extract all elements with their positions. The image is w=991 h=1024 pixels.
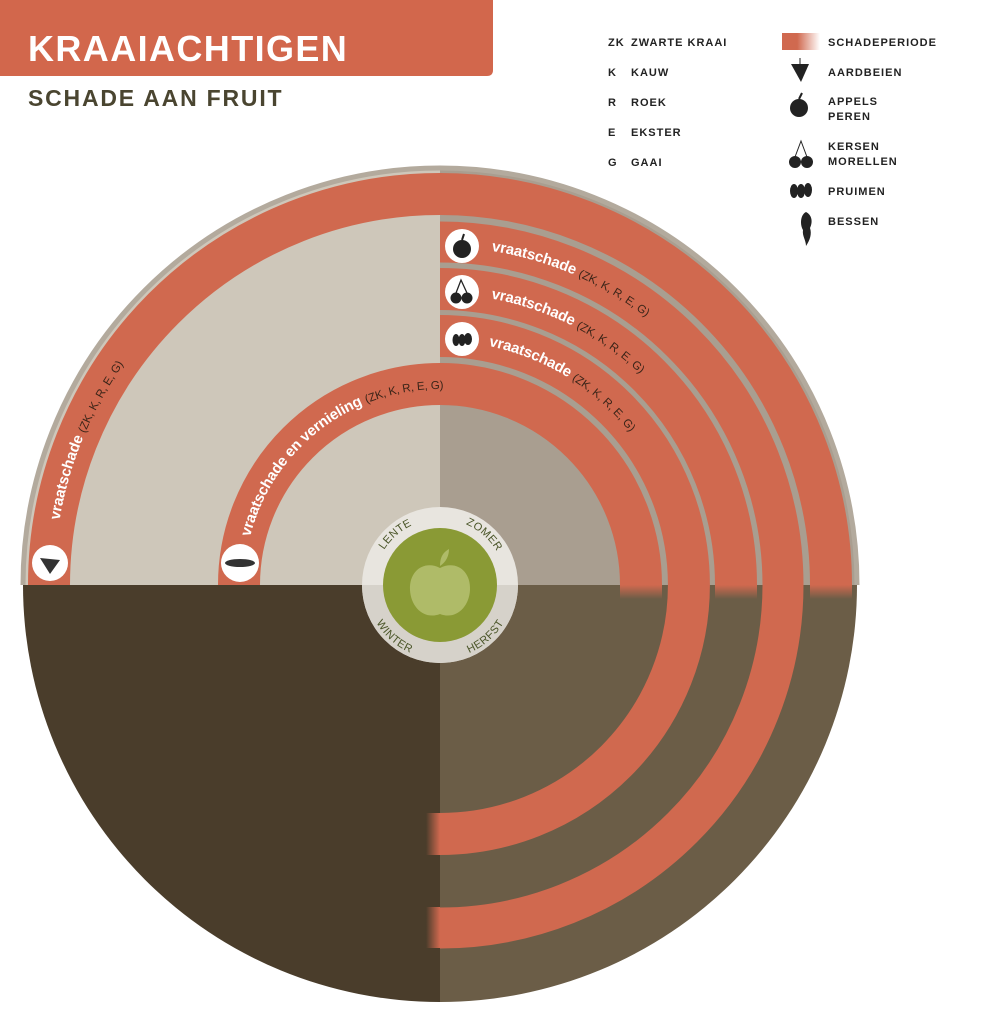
icon: strawberry inner: [221, 544, 259, 582]
legend: fruit: PRUIMEN: [828, 186, 886, 198]
center seasons disc: ZOMER: [466, 518, 502, 551]
band labels: vraatschade en vernieling (ZK, K, R, E, G): [242, 380, 443, 535]
band 2: top right + bottom right: [440, 336, 689, 834]
icon: cherries on band3: [445, 275, 479, 309]
band labels: vraatschade (ZK, K, R, E, G): [52, 361, 124, 519]
icon: plums on band2: [445, 322, 479, 356]
legend: birds: E: [608, 127, 616, 139]
title banner: KRAAIACHTIGEN: [28, 28, 348, 69]
center seasons disc: WINTER: [378, 618, 412, 653]
legend: fruit: KERSEN: [828, 141, 880, 153]
icon: strawberry outer: [32, 545, 68, 581]
legend: fruit: PEREN: [828, 111, 871, 123]
band labels: [52, 243, 649, 535]
band 1: top half: [239, 384, 641, 585]
legend: birds: ZK: [608, 37, 625, 49]
legend: fruit: SCHADEPERIODE: [828, 37, 937, 49]
legend: fruit: MORELLEN: [828, 156, 898, 168]
legend: birds: ZWARTE KRAAI: [631, 37, 727, 49]
wheel: [20, 166, 860, 1002]
legend: birds: G: [608, 157, 618, 169]
band labels: vraatschade (ZK, K, R, E, G): [492, 290, 644, 374]
legend: birds: [608, 37, 727, 169]
icon: apple: [410, 565, 470, 616]
legend: fruit: APPELS: [828, 96, 878, 108]
band 4: top right + bottom right: [440, 242, 783, 928]
band 5 outer: top half: [49, 194, 831, 585]
band labels: vraatschade (ZK, K, R, E, G): [490, 338, 635, 432]
legend: birds: KAUW: [631, 67, 669, 79]
legend: fruit: BESSEN: [828, 216, 879, 228]
band labels: vraatschade (ZK, K, R, E, G): [492, 243, 649, 318]
subtitle: SCHADE AAN FRUIT: [28, 85, 283, 111]
center seasons disc: LENTE: [378, 519, 412, 549]
center seasons disc: HERFST: [466, 619, 502, 653]
legend: fruit: AARDBEIEN: [828, 67, 902, 79]
center seasons disc: [362, 507, 518, 663]
title banner: [0, 0, 493, 76]
legend: fruit: [782, 33, 937, 246]
legend: birds: K: [608, 67, 617, 79]
legend: birds: R: [608, 97, 617, 109]
band 3: top right: [440, 289, 736, 585]
icon: apple on band4: [445, 229, 479, 263]
legend: birds: GAAI: [631, 157, 662, 169]
legend: birds: EKSTER: [631, 127, 682, 139]
legend: birds: ROEK: [631, 97, 667, 109]
